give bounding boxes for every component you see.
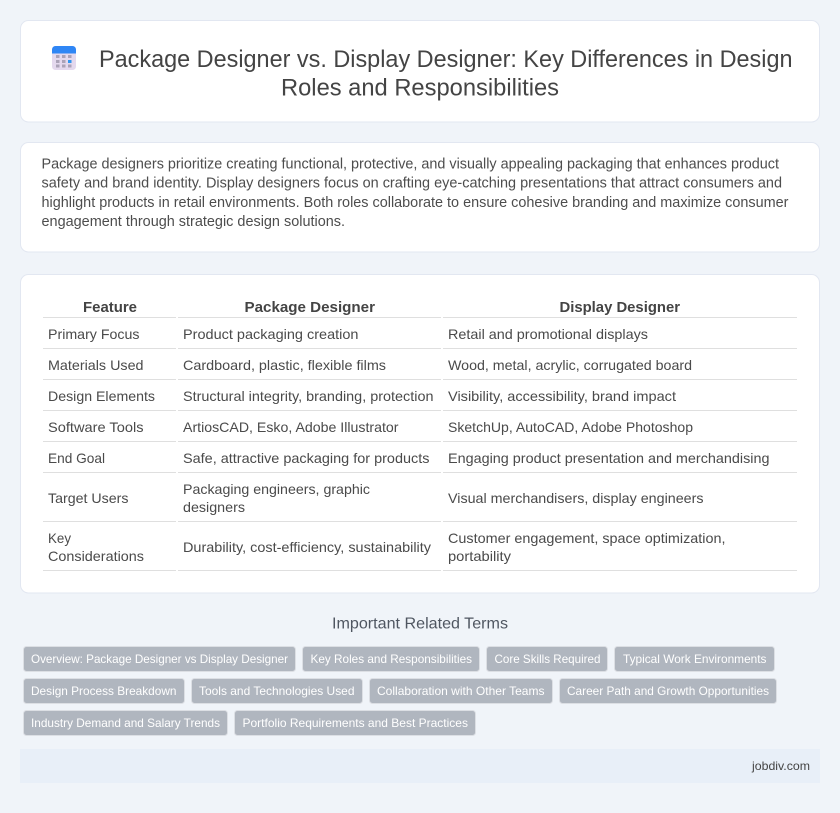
text block: intro: highlight products in retail environments. Both roles collaborate to ensure cohesive branding and maximize consumer xyxy=(42,195,789,211)
text block: intro xyxy=(42,156,789,230)
row: software tools xyxy=(48,419,693,435)
row: design elements: Structural integrity, branding, protection xyxy=(183,388,434,404)
row: software tools: Software Tools xyxy=(48,419,144,435)
title: Package Designer vs. Display Designer: Key Differences in Design xyxy=(99,46,792,73)
row: end goal: End Goal xyxy=(48,450,105,466)
row: end goal: Engaging product presentation and merchandising xyxy=(448,450,770,466)
tags: related terms: Key Roles and Responsibilities xyxy=(310,652,472,666)
table header: Package Designer xyxy=(244,299,375,316)
table header xyxy=(83,299,680,316)
footer xyxy=(20,749,820,783)
table header: Feature xyxy=(83,299,137,316)
row: target users: Target Users xyxy=(48,490,128,506)
title: Roles and Responsibilities xyxy=(281,74,559,102)
text block: intro: engagement through strategic design solutions. xyxy=(42,214,345,230)
tags: related terms: Portfolio Requirements and Best Practices xyxy=(242,716,468,730)
row: design elements xyxy=(48,388,676,404)
table header: Display Designer xyxy=(560,299,680,316)
row: materials used: Materials Used xyxy=(48,357,144,373)
row: primary focus: Retail and promotional displays xyxy=(448,326,648,342)
row: primary focus: Product packaging creation xyxy=(183,326,358,342)
row: software tools: SketchUp, AutoCAD, Adobe Photoshop xyxy=(448,419,693,435)
row: key considerations: Considerations xyxy=(48,548,144,564)
tags: related terms: Collaboration with Other Teams xyxy=(377,684,544,698)
icon: calendar xyxy=(52,46,76,70)
tags: related terms: Industry Demand and Salary Trends xyxy=(31,716,220,730)
row: primary focus: Primary Focus xyxy=(48,326,140,342)
row: key considerations: Customer engagement, space optimization, xyxy=(448,530,726,546)
footer: jobdiv.com xyxy=(751,759,810,773)
row: materials used: Wood, metal, acrylic, corrugated board xyxy=(448,357,692,373)
tags: related terms: Tools and Technologies Used xyxy=(199,684,354,698)
panel: comparison table xyxy=(20,274,820,593)
tags: related terms: Core Skills Required xyxy=(494,652,600,666)
row: design elements: Design Elements xyxy=(48,388,155,404)
row: software tools: ArtiosCAD, Esko, Adobe Illustrator xyxy=(183,419,399,435)
row: end goal: Safe, attractive packaging for products xyxy=(183,450,430,466)
title xyxy=(99,46,792,102)
row: design elements: Visibility, accessibility, brand impact xyxy=(448,388,676,404)
row: target users: Visual merchandisers, display engineers xyxy=(448,490,704,506)
row: primary focus xyxy=(48,326,648,342)
row: key considerations: portability xyxy=(448,548,511,564)
tags: related terms: Typical Work Environments xyxy=(623,652,766,666)
row: target users: Packaging engineers, graphic xyxy=(183,481,370,497)
tags: related terms: Career Path and Growth Opportunities xyxy=(567,684,769,698)
text block: intro: Package designers prioritize creating functional, protective, and visually appealing packaging that enhances product xyxy=(42,156,779,172)
row: key considerations: Durability, cost-efficiency, sustainability xyxy=(183,539,431,555)
tags: related terms: Design Process Breakdown xyxy=(31,684,176,698)
panel: intro paragraph xyxy=(20,142,820,252)
tags: related terms xyxy=(24,646,776,736)
row: key considerations: Key xyxy=(48,530,71,546)
tags: related terms: Overview: Package Designer vs Display Designer xyxy=(31,652,288,666)
heading: related terms: Important Related Terms xyxy=(332,616,508,632)
row: materials used xyxy=(48,357,692,373)
panel: header xyxy=(20,20,820,122)
text block: intro: safety and brand identity. Display designers focus on crafting eye-catching presentations that attract consumers and xyxy=(42,176,782,192)
row: key considerations xyxy=(48,530,726,564)
row: target users: designers xyxy=(183,499,245,515)
row: target users xyxy=(48,481,704,515)
row: materials used: Cardboard, plastic, flexible films xyxy=(183,357,386,373)
row: end goal xyxy=(48,450,770,466)
